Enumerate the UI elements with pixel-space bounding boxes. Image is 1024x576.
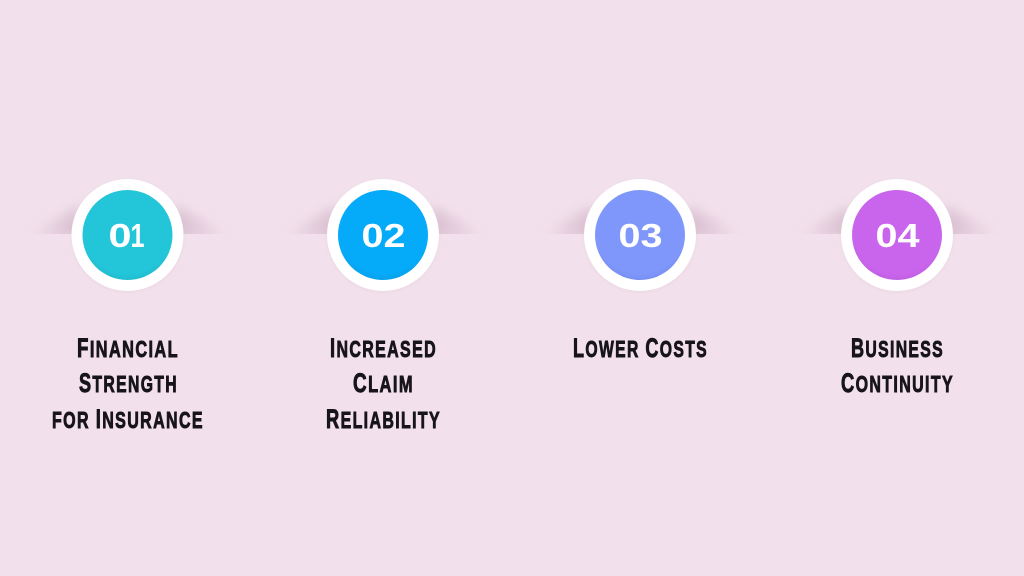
number 3: 03 <box>618 217 662 254</box>
step 1 <box>43 179 214 428</box>
ring 2 <box>327 179 439 291</box>
number 1: 0 <box>108 217 132 254</box>
number 1: 1 <box>130 217 144 254</box>
label 1: FOR INSURANCE <box>52 404 204 434</box>
shadow wedges 4 <box>813 206 984 234</box>
disc 1 <box>82 190 172 280</box>
label 1 <box>52 333 204 434</box>
label 1: FINANCIAL <box>77 333 179 363</box>
number 2: 02 <box>362 217 406 254</box>
ring 4 <box>841 179 953 291</box>
label 4 <box>841 333 954 398</box>
step 4 <box>813 179 984 393</box>
label 2: INCREASED <box>330 333 437 363</box>
disc 4 <box>852 190 942 280</box>
ring 3 <box>584 179 696 291</box>
label 2: RELIABILITY <box>326 404 441 434</box>
label 4: CONTINUITY <box>841 368 954 398</box>
ring 1 <box>72 179 184 291</box>
number 1 <box>108 217 144 254</box>
shadow wedges 2 <box>299 206 470 234</box>
label 2: CLAIM <box>353 368 414 398</box>
shadow wedges 1 <box>43 206 214 234</box>
label 3: LOWER COSTS <box>573 333 708 363</box>
number 4: 04 <box>876 217 920 254</box>
shadow wedges 3 <box>556 206 726 234</box>
label 2 <box>326 333 441 434</box>
step 3 <box>556 179 726 358</box>
step 2 <box>299 179 470 428</box>
disc 2 <box>338 190 428 280</box>
label 1: STRENGTH <box>79 368 178 398</box>
disc 3 <box>595 190 685 280</box>
label 4: BUSINESS <box>851 333 944 363</box>
